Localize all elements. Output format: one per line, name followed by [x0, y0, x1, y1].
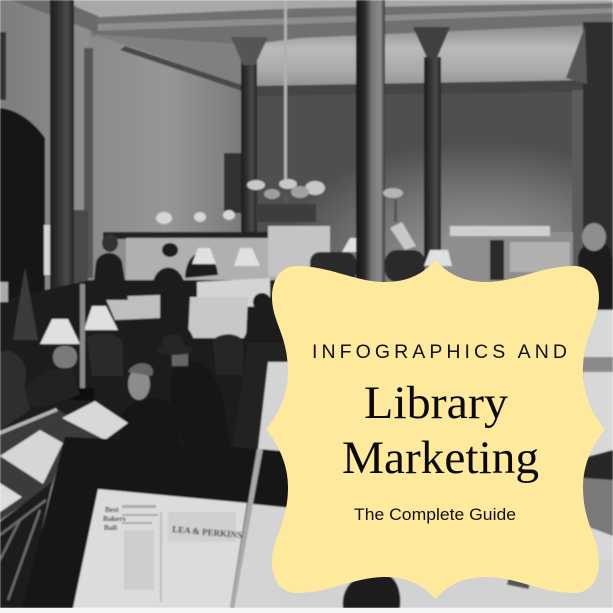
lamp post — [80, 284, 85, 396]
table edge stripe — [0, 408, 58, 435]
back desk pale cloth — [126, 238, 286, 288]
back wall desk lamps — [156, 207, 275, 224]
side wall — [88, 30, 245, 315]
bottom white margin — [0, 608, 613, 613]
table lamp shades — [40, 238, 452, 344]
ceiling top beam — [90, 0, 613, 46]
chandelier rod — [284, 0, 287, 185]
left table — [0, 409, 110, 520]
pilaster — [84, 48, 93, 278]
corner wall and right pillar — [572, 90, 586, 270]
column right — [424, 57, 441, 267]
diagonal cornice left — [10, 0, 98, 34]
young man seated — [120, 398, 180, 444]
upper slanted board — [232, 343, 292, 452]
crowd mid-right — [310, 240, 504, 282]
reading desk papers — [197, 278, 270, 308]
metal pole — [230, 449, 263, 608]
label shape — [266, 260, 605, 599]
title: Library: Library — [364, 377, 509, 429]
map on table — [0, 430, 63, 484]
left wall — [0, 0, 88, 310]
subtitle: The Complete Guide — [354, 506, 516, 524]
chandelier — [247, 179, 325, 218]
right-side paper — [583, 310, 613, 608]
second newspaper page — [234, 504, 292, 608]
column centre-left — [241, 58, 257, 248]
bottom strip behind label — [280, 560, 613, 608]
column tall centre — [356, 0, 385, 285]
back wall — [250, 92, 590, 292]
newspaper print — [122, 505, 236, 602]
left gothic shelf — [13, 267, 38, 340]
back desk dark top — [103, 232, 268, 239]
ceiling — [255, 25, 585, 92]
dark round object — [343, 572, 400, 608]
column far left — [50, 0, 74, 306]
seated man left — [20, 368, 80, 408]
newspaper headlines: LEA & PERKINS — [172, 524, 242, 540]
open book on table — [62, 401, 128, 440]
newspaper headlines: Bakers — [103, 514, 126, 523]
left arched door — [0, 108, 45, 310]
clock — [0, 32, 6, 100]
back wall cornice — [255, 80, 585, 96]
newspaper headlines: Best — [105, 505, 119, 514]
doorway — [224, 153, 242, 213]
newspaper headlines: Ball — [104, 523, 117, 532]
chair backs — [87, 333, 123, 376]
foreground black board — [22, 437, 292, 608]
chair lower-left — [0, 482, 52, 608]
newspaper page — [73, 489, 247, 608]
man in hat, seated — [170, 361, 230, 446]
right desk stacks — [448, 232, 573, 282]
newspaper headlines — [103, 505, 242, 540]
mid room dark floor band — [0, 280, 288, 460]
yellow ornamental label — [266, 260, 605, 599]
far chandelier — [383, 188, 403, 222]
title: Marketing: Marketing — [342, 432, 539, 484]
woman, right edge — [576, 242, 613, 320]
standing men — [92, 234, 285, 370]
heading line: INFOGRAPHICS AND: INFOGRAPHICS AND — [312, 341, 567, 363]
seated man far left — [0, 351, 30, 430]
